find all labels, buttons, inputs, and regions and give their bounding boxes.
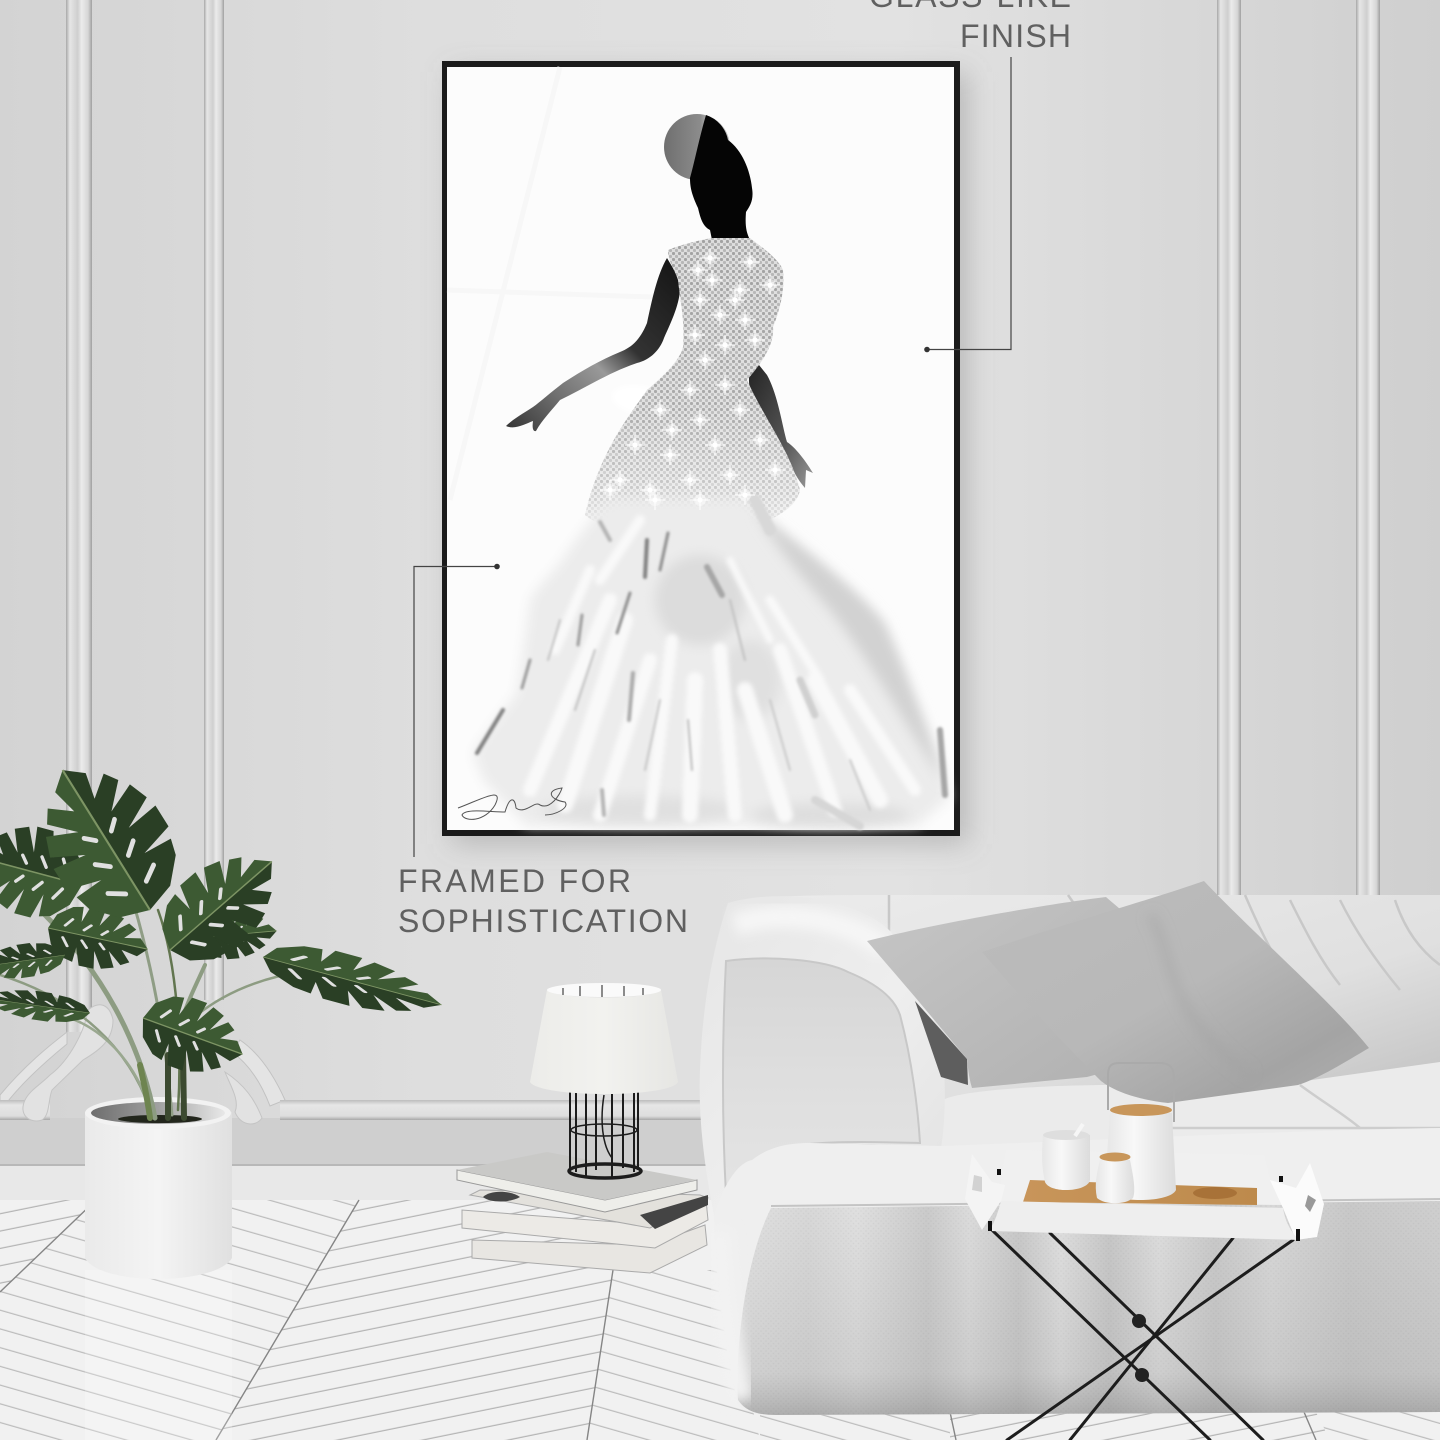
lower front cushion	[714, 1128, 1440, 1415]
sofa	[700, 881, 1440, 1415]
soft grey shading on skirt	[540, 510, 945, 827]
wall moulding panels	[0, 0, 1380, 1124]
side table with tray	[965, 1063, 1324, 1440]
table legs	[992, 1230, 1293, 1440]
right arm	[749, 360, 813, 488]
tray front	[989, 1201, 1300, 1240]
hip feathers	[610, 381, 670, 419]
jar handle	[1108, 1063, 1174, 1122]
hair disk	[664, 114, 730, 180]
table lamp	[530, 983, 678, 1178]
tray interior	[1000, 1150, 1288, 1205]
left arm	[506, 258, 680, 431]
small jar	[1096, 1160, 1134, 1203]
white feather streaks	[530, 520, 915, 815]
callout: framed for sophistication	[398, 564, 688, 939]
potted plant	[0, 738, 448, 1279]
sparkles	[600, 248, 785, 510]
frame shadow on wall	[452, 72, 968, 844]
stack of books	[457, 1152, 708, 1273]
callout: framed for sophistication: SOPHISTICATION	[398, 903, 688, 939]
sequined bodice	[585, 238, 800, 536]
framed artwork	[442, 61, 960, 836]
canvas	[447, 67, 954, 830]
glass reflection	[447, 67, 740, 500]
seat cushions	[940, 1062, 1440, 1165]
monstera leaves	[42, 898, 154, 979]
herringbone floor	[0, 1200, 1440, 1440]
baseboard	[0, 1164, 1440, 1200]
wooden board	[1023, 1180, 1257, 1205]
signature	[458, 788, 566, 819]
grey pillows	[867, 897, 1150, 1088]
cup	[1042, 1131, 1090, 1190]
callout: glass-like finish: FINISH	[960, 18, 1071, 54]
white pot	[85, 1112, 232, 1279]
stems	[0, 885, 300, 1118]
callout: framed for sophistication: FRAMED FOR	[398, 863, 631, 899]
head and neck	[690, 115, 753, 240]
grey feather streaks	[477, 500, 945, 826]
large jar	[1106, 1113, 1176, 1200]
dark gap beside arm	[915, 1001, 968, 1085]
feathered skirt	[473, 500, 950, 827]
tray handles	[965, 1154, 1005, 1230]
callout: glass-like finish	[869, 0, 1071, 352]
arm front panel	[723, 958, 920, 1195]
sofa back	[730, 895, 1440, 1120]
left arm	[700, 896, 945, 1215]
frame	[442, 61, 960, 836]
